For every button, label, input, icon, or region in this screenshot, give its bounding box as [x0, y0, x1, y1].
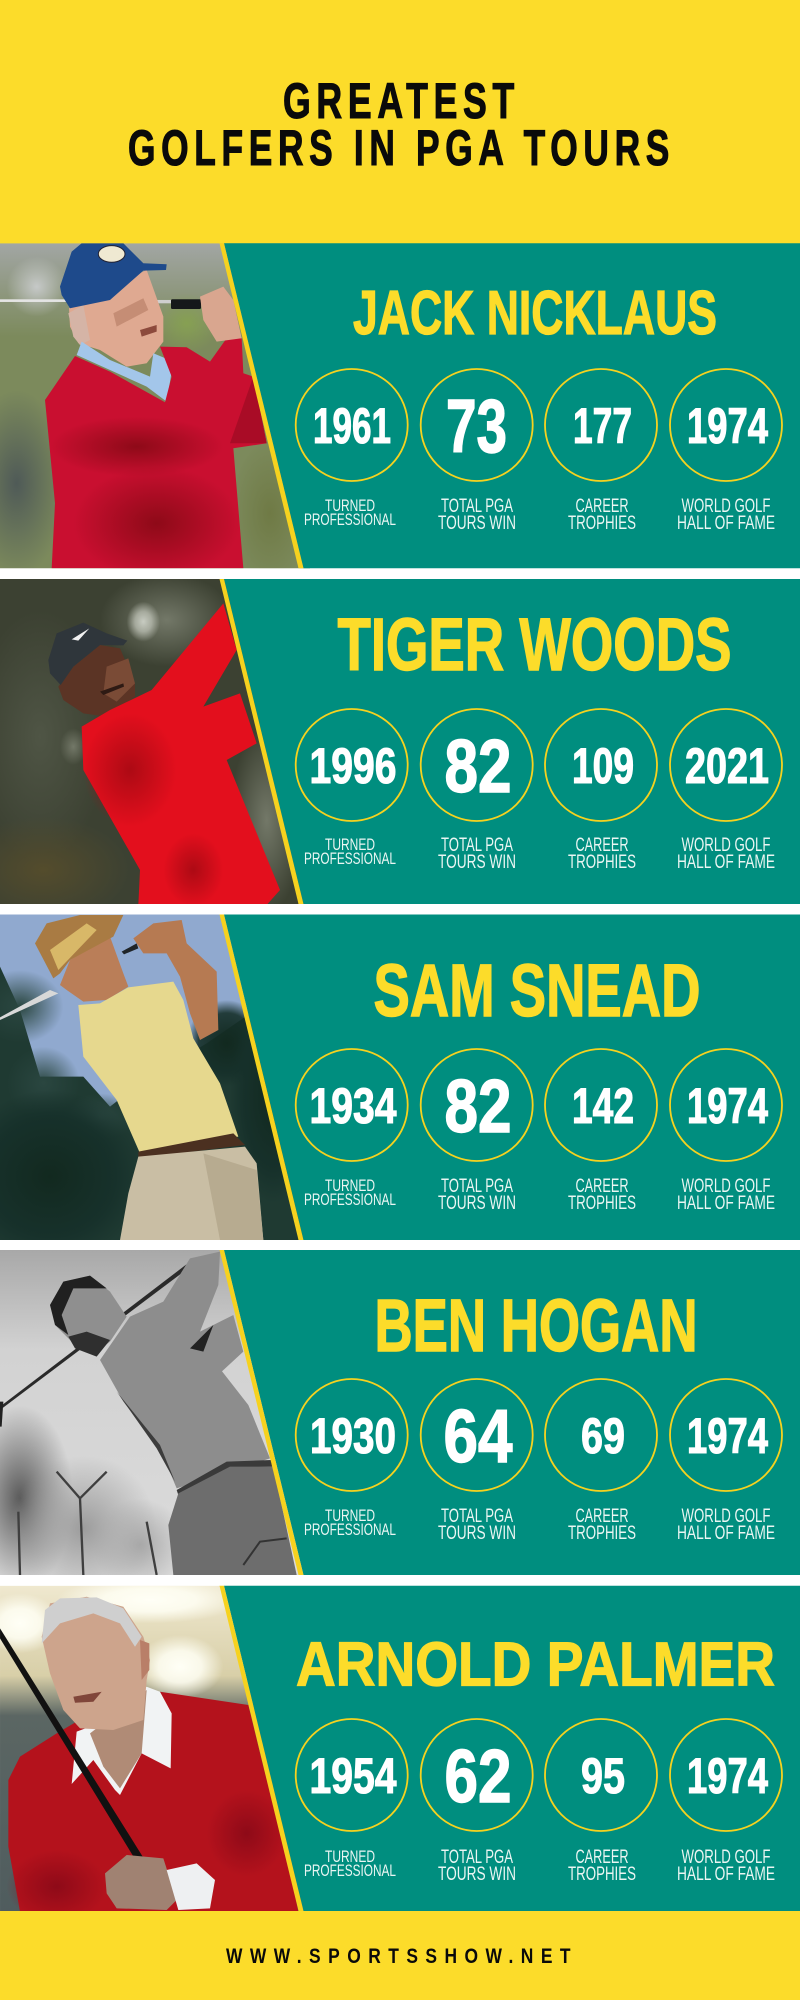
stat: world golf hall of fame: 2021 [685, 738, 769, 794]
teal background [224, 243, 800, 568]
stat: turned professional: TURNED [325, 496, 375, 515]
stat: total PGA tours win: 62 [444, 1734, 512, 1818]
stat: turned professional: PROFESSIONAL [304, 1520, 396, 1539]
stat: career trophies: CAREER [576, 496, 628, 517]
stat: total PGA tours win: TOURS WIN [438, 1864, 516, 1885]
stat: turned professional: 1961 [313, 398, 391, 454]
photo: Jack Nicklaus [0, 243, 310, 568]
stat: career trophies: CAREER [576, 835, 628, 856]
stat: total PGA tours win: TOURS WIN [438, 1193, 516, 1214]
diagonal stripe [220, 1250, 304, 1575]
stat: turned professional: 1954 [310, 1748, 397, 1804]
stat: turned professional: PROFESSIONAL [304, 849, 396, 868]
teal background [224, 1250, 800, 1575]
photo: Ben Hogan [0, 1250, 304, 1575]
stat: world golf hall of fame [670, 709, 782, 873]
stat: total PGA tours win: TOTAL PGA [441, 835, 513, 856]
stat: world golf hall of fame [670, 1049, 782, 1214]
stat: world golf hall of fame: 1974 [687, 398, 768, 454]
stat: total PGA tours win: TOTAL PGA [441, 1506, 513, 1527]
stat: total PGA tours win: TOTAL PGA [441, 1176, 513, 1197]
diagonal stripe [220, 914, 304, 1240]
stat: total PGA tours win: 82 [444, 1064, 512, 1148]
stat: world golf hall of fame: 1974 [687, 1078, 768, 1134]
stat: world golf hall of fame [670, 369, 782, 534]
stat: career trophies [545, 1049, 657, 1214]
panel: Jack Nicklaus [0, 243, 800, 587]
stat: career trophies: 109 [572, 738, 634, 794]
stat: career trophies: TROPHIES [568, 1523, 636, 1544]
photo: Arnold Palmer [0, 1586, 304, 1911]
stat: total PGA tours win [421, 369, 533, 534]
stat: turned professional: 1996 [310, 738, 396, 794]
stat: turned professional: 1934 [310, 1078, 397, 1134]
stat: total PGA tours win [421, 1719, 533, 1885]
photo: Tiger Woods [0, 579, 304, 904]
panel: Tiger Woods [0, 573, 800, 923]
stat: turned professional: 1930 [310, 1408, 396, 1464]
stat: career trophies [545, 369, 657, 534]
stat: career trophies: CAREER [576, 1847, 628, 1868]
teal background [224, 914, 800, 1240]
footer website text: WWW.SPORTSSHOW.NET [226, 1945, 578, 1968]
stat: total PGA tours win: 64 [444, 1394, 513, 1478]
stat: turned professional [296, 1719, 408, 1880]
stat: world golf hall of fame [670, 1719, 782, 1885]
stat: career trophies [545, 1719, 657, 1885]
stat: total PGA tours win [421, 1049, 533, 1214]
stat: world golf hall of fame: 1974 [687, 1408, 768, 1464]
stat: total PGA tours win: TOTAL PGA [441, 496, 513, 517]
teal background [224, 1586, 800, 1911]
stat: career trophies: CAREER [576, 1176, 628, 1197]
stat: career trophies [545, 1379, 657, 1544]
stat: career trophies: 142 [572, 1078, 634, 1134]
stat: career trophies: TROPHIES [568, 513, 636, 534]
top header background [0, 0, 800, 244]
stat: total PGA tours win: TOURS WIN [438, 852, 516, 873]
stat: total PGA tours win: 82 [444, 724, 512, 808]
stat: turned professional: TURNED [325, 1176, 375, 1195]
stat: turned professional [296, 1049, 408, 1209]
stat: world golf hall of fame [670, 1379, 782, 1544]
stat: career trophies: 95 [581, 1748, 625, 1804]
stat: career trophies: 69 [581, 1408, 625, 1464]
panel: Sam Snead [0, 914, 800, 1263]
stat: career trophies: 177 [573, 398, 632, 454]
stat: turned professional [296, 709, 408, 868]
stat: total PGA tours win [421, 709, 533, 873]
teal background [224, 579, 800, 904]
stat: career trophies: TROPHIES [568, 852, 636, 873]
stat: turned professional: TURNED [325, 1506, 375, 1525]
stat: total PGA tours win: TOURS WIN [438, 513, 516, 534]
stat: world golf hall of fame: 1974 [687, 1748, 768, 1804]
stat: turned professional: TURNED [325, 1847, 375, 1866]
stat: career trophies: TROPHIES [568, 1864, 636, 1885]
diagonal stripe [220, 1586, 304, 1911]
stat: turned professional: PROFESSIONAL [304, 1861, 396, 1880]
stat: turned professional: PROFESSIONAL [304, 510, 396, 529]
stat: turned professional: TURNED [325, 835, 375, 854]
panel: Arnold Palmer [0, 1577, 800, 1923]
title: GREATEST [283, 73, 520, 129]
stat: career trophies: CAREER [576, 1506, 628, 1527]
stat: total PGA tours win [421, 1379, 533, 1544]
stat: career trophies: TROPHIES [568, 1193, 636, 1214]
diagonal stripe [220, 243, 304, 568]
stat: turned professional [296, 1379, 408, 1539]
stat: turned professional: PROFESSIONAL [304, 1190, 396, 1209]
stat: turned professional [296, 369, 408, 529]
diagonal stripe [220, 579, 304, 904]
stat: total PGA tours win: TOTAL PGA [441, 1847, 513, 1868]
title [128, 73, 675, 176]
stat: career trophies [545, 709, 657, 873]
stat: total PGA tours win: TOURS WIN [438, 1523, 516, 1544]
stat: total PGA tours win: 73 [446, 384, 507, 468]
footer band [0, 1911, 800, 2000]
panel: Ben Hogan [0, 1250, 800, 1602]
photo: Sam Snead [0, 914, 304, 1240]
